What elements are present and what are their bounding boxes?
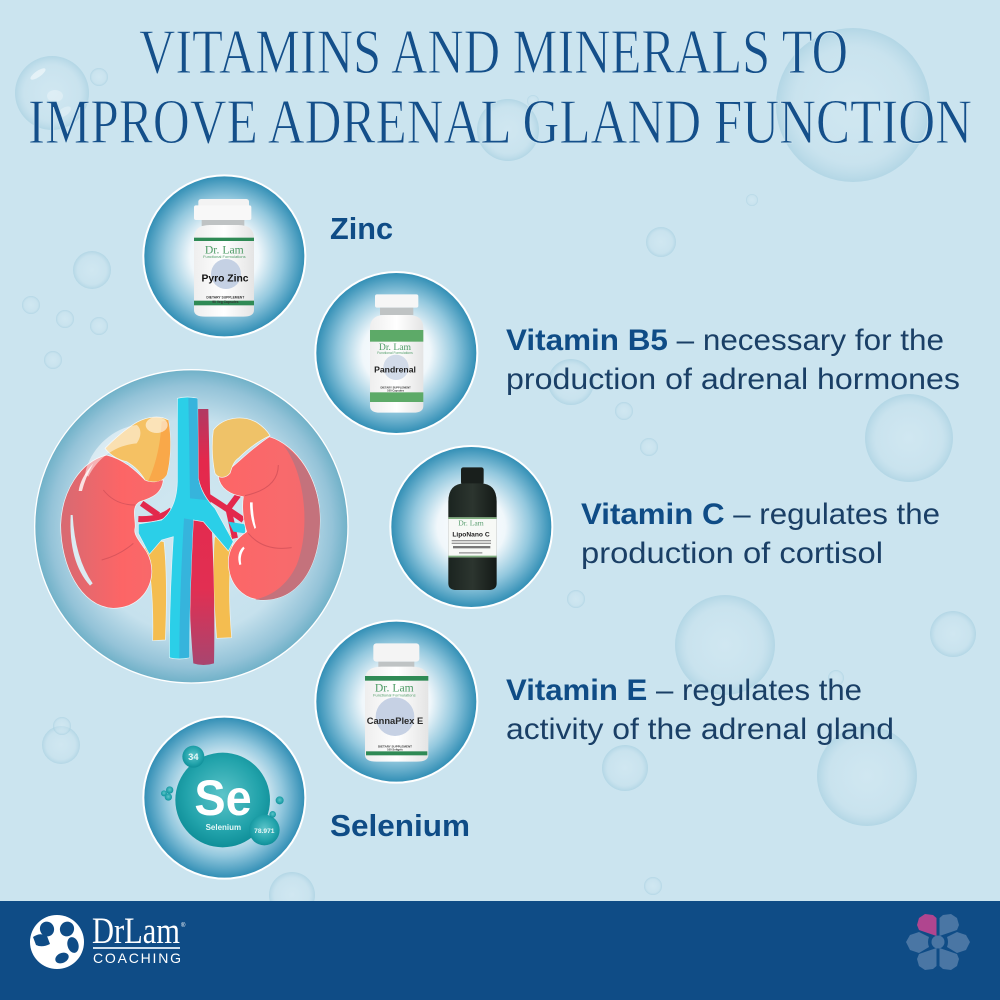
left kidney — [61, 455, 163, 608]
bottle: Pandrenal: Dr. Lam — [379, 342, 412, 353]
text: vitamin B5: production of adrenal hormones — [506, 363, 960, 396]
text: vitamin C: production of cortisol — [581, 537, 883, 570]
right adrenal gland — [212, 418, 270, 477]
text: vitamin C — [581, 498, 940, 570]
footer band — [0, 901, 1000, 1000]
bottle: Pandrenal: 100 Capsules — [387, 389, 405, 393]
text: vitamin B5 — [506, 324, 960, 396]
right kidney — [218, 437, 320, 600]
product circle: vitamin C — [390, 446, 552, 608]
bottle: Pyro Zinc: 90 Veg Capsules — [212, 300, 239, 304]
logo: Dr Lam Coaching: COACHING — [93, 950, 181, 966]
bottle: CannaPlex E: CannaPlex E — [367, 716, 423, 726]
bottle: Pyro Zinc: Functional Formulations — [203, 254, 246, 259]
bottle: LipoNano C: LipoNano C — [452, 532, 490, 539]
bottle: Pyro Zinc: Dr. Lam — [205, 243, 244, 256]
bottle: CannaPlex E: DIETARY SUPPLEMENT — [378, 744, 412, 748]
bottle: CannaPlex E: 100 Softgels — [387, 748, 403, 752]
logo wordmark: DrLam — [92, 911, 180, 952]
bottle: Pyro Zinc: Pyro Zinc — [201, 274, 249, 285]
text: vitamin E: activity of the adrenal gland — [506, 713, 894, 746]
icon: flower emblem — [906, 914, 970, 970]
bottle: LipoNano C: Dr. Lam — [458, 518, 484, 527]
logo: Dr Lam Coaching — [30, 911, 186, 969]
bottle: LipoNano C — [448, 467, 497, 590]
label: zinc: Zinc — [330, 211, 393, 246]
bottle: CannaPlex E — [365, 643, 428, 762]
renal vessels red — [138, 495, 243, 538]
bottle: Pandrenal: Functional Formulations — [377, 351, 413, 355]
kidney creases — [102, 465, 292, 560]
title — [28, 17, 972, 157]
text: vitamin E: Vitamin E – regulates the — [506, 674, 862, 707]
selenium element sphere: Selenium — [206, 823, 241, 832]
ureters — [145, 522, 233, 641]
product circle: vitamin B5 — [315, 272, 477, 434]
bottle: CannaPlex E: Functional Formulations — [373, 692, 416, 697]
bottle: Pandrenal: Pandrenal — [374, 365, 416, 375]
bottle: CannaPlex E: Dr. Lam — [375, 681, 414, 694]
product circle: selenium — [143, 717, 305, 879]
icon: logo flower circle — [30, 915, 84, 969]
kidney illustration — [35, 370, 348, 683]
selenium element sphere: 78.971 — [254, 828, 275, 835]
bottle: Pyro Zinc — [194, 199, 254, 317]
aorta — [189, 409, 214, 665]
selenium element sphere: 34 — [188, 752, 199, 762]
product circle: vitamin E — [315, 621, 477, 783]
text: vitamin B5: Vitamin B5 – necessary for the — [506, 324, 944, 357]
title: VITAMINS AND MINERALS TO — [139, 17, 848, 87]
left adrenal gland — [105, 417, 170, 482]
vena cava — [138, 397, 233, 659]
selenium element sphere — [161, 746, 284, 847]
label: selenium: Selenium — [330, 808, 470, 843]
glass highlights — [70, 417, 256, 586]
bottle: Pandrenal: DIETARY SUPPLEMENT — [381, 385, 411, 389]
bottle: Pandrenal — [370, 294, 423, 413]
selenium element sphere: Se — [194, 770, 252, 826]
bottle: Pyro Zinc: DIETARY SUPPLEMENT — [206, 296, 244, 300]
product circle: zinc — [143, 175, 305, 337]
text: vitamin E — [506, 674, 894, 746]
text: vitamin C: Vitamin C – regulates the — [581, 498, 940, 531]
logo: Dr Lam Coaching: ® — [181, 922, 186, 929]
